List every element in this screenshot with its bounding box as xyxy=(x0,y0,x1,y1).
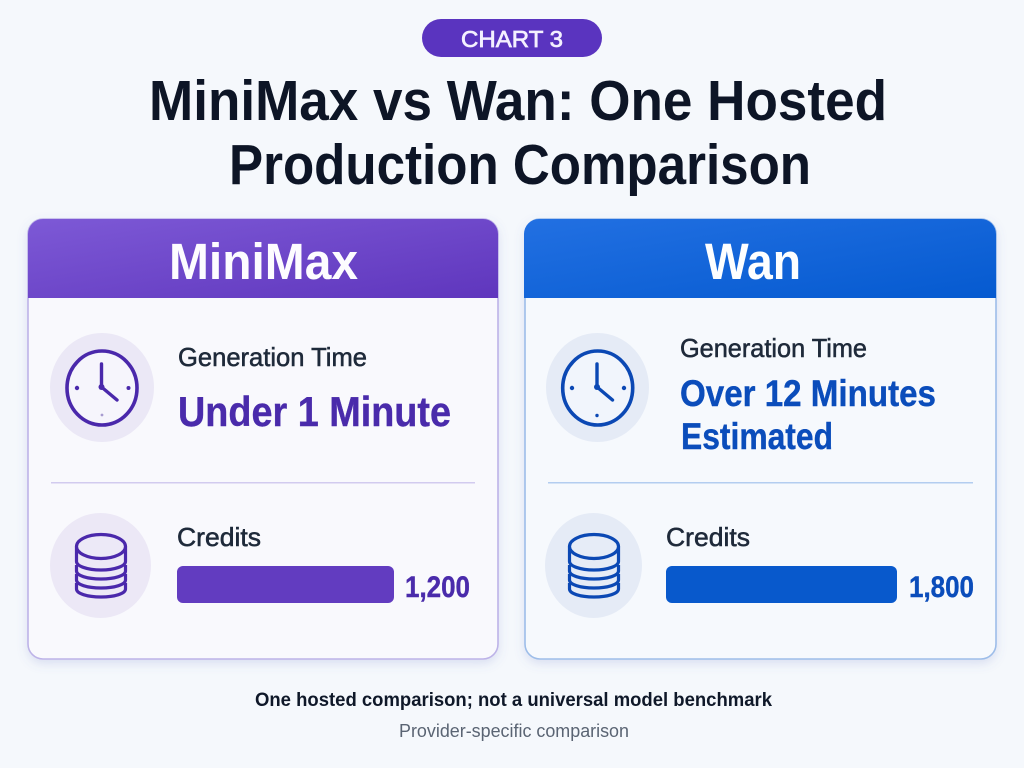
card background: MiniMax xyxy=(28,219,498,659)
footnote: secondary: Provider-specific comparison xyxy=(399,721,629,741)
icon: coins xyxy=(545,513,642,618)
title xyxy=(149,69,887,197)
badge: Chart 3: CHART 3 xyxy=(461,26,563,52)
card background: Wan xyxy=(525,219,996,659)
header: MiniMax xyxy=(28,219,498,298)
divider xyxy=(51,482,475,484)
credits bar xyxy=(666,566,897,603)
footnote: main: One hosted comparison; not a universal model benchmark xyxy=(255,690,772,711)
generation time value: Under 1 Minute xyxy=(178,388,451,435)
header: Wan: Wan xyxy=(705,233,801,290)
icon: coins xyxy=(50,513,151,618)
icon: clock xyxy=(546,333,649,442)
credits value: 1,200 xyxy=(405,571,470,604)
credits label: Credits xyxy=(177,522,261,552)
generation time value: Estimated xyxy=(681,416,833,457)
credits label: Credits xyxy=(666,522,750,552)
generation time label: Generation Time xyxy=(680,333,867,363)
panel: Wan xyxy=(524,219,996,659)
title: Production Comparison xyxy=(229,133,811,197)
title: MiniMax vs Wan: One Hosted xyxy=(149,69,887,133)
icon: clock xyxy=(50,333,154,442)
header: Wan xyxy=(524,219,996,298)
panel: MiniMax xyxy=(28,219,498,659)
divider xyxy=(548,482,973,484)
credits value: 1,800 xyxy=(909,571,974,604)
generation time label: Generation Time xyxy=(178,342,367,372)
header: MiniMax: MiniMax xyxy=(169,233,358,290)
generation time value xyxy=(680,373,936,457)
credits bar xyxy=(177,566,394,603)
generation time value: Over 12 Minutes xyxy=(680,373,936,414)
badge: Chart 3 xyxy=(422,19,602,57)
